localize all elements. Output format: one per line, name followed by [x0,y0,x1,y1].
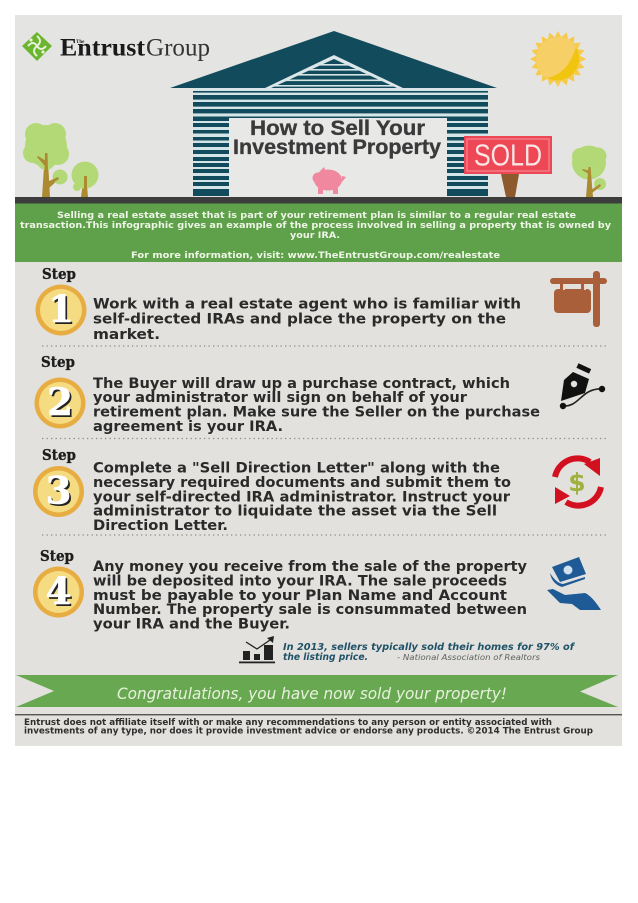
step 2 text [93,376,540,435]
intro text [20,210,611,261]
icon: money and hand [547,557,601,610]
logo wordmark: Group: Group [146,34,210,62]
step 4 label: Step [40,548,74,565]
step 4 [33,548,601,632]
panel: green intro [15,204,622,262]
step 2 [34,354,605,435]
step 3 text: your self-directed IRA administrator. Instruct your [93,490,511,506]
step 2 badge [34,378,86,428]
step 4 badge: 4 [46,569,71,613]
step 4 text: Any money you receive from the sale of the property [93,559,528,575]
step 1 text: self-directed IRAs and place the property on the [93,312,506,328]
step 1 text: market. [93,327,160,343]
step 2 label: Step [41,354,75,371]
step 2 badge: 2 [49,382,75,426]
callout text: - National Association of Realtors [397,652,541,662]
divider rule [15,714,622,715]
step 2 text: agreement is your IRA. [93,419,283,435]
house wall [193,88,488,196]
dividers [42,346,608,535]
step 1 [36,266,607,343]
logo: The Entrust Group [22,32,210,62]
step 4 text: your IRA and the Buyer. [93,616,290,632]
roof [170,31,497,88]
ground strip [15,197,622,204]
title [233,117,441,159]
sold text: SOLD [474,138,542,172]
icon: fountain pen [560,363,605,409]
disclaimer: investments of any type, nor does it provide investment advice or endorse any products. ©2014 The Entrust Group [24,726,593,736]
logo wordmark: Entrust [60,34,146,62]
sign board [464,136,552,174]
step 3 badge: 3 [46,468,71,512]
step 2 text: retirement plan. Make sure the Seller on the purchase [93,404,540,420]
step 4 text: must be payable to your Plan Name and Account [93,588,507,604]
step 1 text: Work with a real estate agent who is familiar with [93,296,521,312]
icon: piggy bank [312,167,346,194]
step 4 text: Number. The property sale is consummated between [93,602,527,618]
icon: green diamond logo mark [22,32,52,61]
illustration: right tree [572,146,606,197]
title: How to Sell Your [250,117,425,140]
title: Investment Property [233,136,441,159]
step 3 text: Complete a "Sell Direction Letter" along with the [93,460,500,476]
banner: congratulations [16,675,618,707]
step 2 text: your administrator will sign on behalf of your [93,390,468,406]
icon: hanging sign [550,271,607,327]
step 4 badge [33,566,84,618]
illustration: house [170,31,497,197]
step 3 text: necessary required documents and submit them to [93,475,511,491]
callout text: In 2013, sellers typically sold their homes for 97% of [283,642,576,653]
step 1 badge: 1 [50,289,76,333]
illustration: left trees [23,123,98,197]
step 2 badge: 2 [47,380,73,424]
step 3 badge: 3 [48,470,73,514]
step 1 badge [36,284,86,336]
icon: red arrows with dollar [555,458,601,506]
sign post [501,174,519,197]
step 1 badge: 1 [48,287,74,331]
panel: steps background [15,262,622,746]
icon: rising bar chart [239,636,275,663]
logo wordmark: The: The [76,40,85,45]
step 4 text: will be deposited into your IRA. The sale proceeds [93,574,507,590]
step 3 badge [33,466,84,517]
banner text: Congratulations, you have now sold your property! [117,684,507,703]
intro text: your IRA. [290,230,340,241]
intro text: transaction.This infographic gives an example of the process involved in selling a property that is owned by [20,220,611,231]
callout text [283,642,576,663]
step 3 text [93,460,511,534]
sold sign [464,136,552,197]
callout text: the listing price. [283,652,368,663]
step 3 text: Direction Letter. [93,518,228,534]
intro text: Selling a real estate asset that is part of your retirement plan is similar to a regular real estate [57,210,576,221]
step 2 text: The Buyer will draw up a purchase contract, which [93,376,510,392]
icon: red arrows with dollar: $ [568,468,586,497]
callout: listing price statistic [239,636,576,663]
step 4 text [93,559,528,632]
garage door opening [229,118,447,197]
intro text: For more information, visit: www.TheEntrustGroup.com/realestate [131,250,500,261]
step 1 label: Step [42,266,76,283]
icon: sun [530,31,586,87]
step 3 [33,447,601,534]
step 1 text [93,296,521,343]
step 3 label: Step [42,447,76,464]
step 3 text: administrator to liquidate the asset via the Sell [93,504,497,520]
panel: header scene [15,15,622,197]
step 4 badge: 4 [48,571,73,615]
disclaimer: Entrust does not affiliate itself with or make any recommendations to any person or entity associated with [24,718,552,728]
disclaimer [24,718,593,736]
